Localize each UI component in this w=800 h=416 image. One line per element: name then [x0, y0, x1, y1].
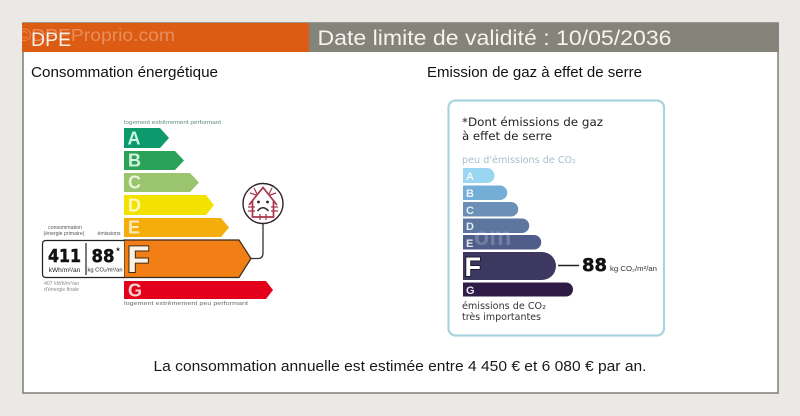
label: bottom of energy scale: logement extrêmement peu performant	[124, 301, 249, 307]
energy bar G: G	[128, 280, 142, 300]
label: low emissions: peu d'émissions de CO₂	[462, 155, 576, 166]
energy bar G	[124, 280, 273, 300]
value: 88 CO2: 88	[92, 246, 114, 267]
text: annual cost estimate: La consommation annuelle est estimée entre 4 450 € et 6 080 € par an.	[154, 359, 646, 375]
heading: energy consumption: Consommation énergétique	[31, 65, 218, 81]
caption: emissions: émissions	[97, 231, 121, 237]
energy bar B	[124, 150, 184, 170]
chart: energy label scale	[124, 120, 273, 307]
header: orange DPE band: DPE	[31, 29, 71, 51]
value: 88 kg CO2	[558, 255, 657, 276]
CO2 bar C: C	[466, 205, 474, 217]
CO2 bar D	[463, 218, 529, 233]
callout: primary energy and emissions values: kg CO₂/m²/an	[87, 268, 123, 274]
callout: primary energy and emissions values	[42, 225, 124, 293]
value: 88 kg CO2: kg CO₂/m²/an	[610, 266, 657, 273]
energy bar B: B	[128, 150, 141, 170]
callout: primary energy and emissions values: *	[116, 246, 120, 256]
callout: primary energy and emissions values: (énergie primaire)	[44, 231, 85, 237]
energy bar A	[124, 128, 169, 148]
header: orange DPE band	[22, 23, 309, 52]
energy bar D: D	[128, 196, 141, 216]
CO2 bar G	[463, 282, 573, 297]
panel: CO2 emissions box: très importantes	[462, 312, 541, 323]
callout: primary energy and emissions values: kWh/m²/an	[49, 267, 81, 274]
energy bar F (selected)	[124, 239, 251, 280]
energy bar D	[124, 195, 214, 216]
label: top of energy scale: logement extrêmement performant	[124, 120, 222, 126]
CO2 bar E: E	[466, 238, 473, 250]
CO2 bar D: D	[466, 221, 474, 233]
energy bar C	[124, 172, 199, 192]
value: 88 kg CO2: 88	[582, 255, 607, 276]
text: greenhouse gas note: *Dont émissions de gaz	[462, 115, 603, 129]
CO2 bar B	[463, 186, 507, 200]
CO2 bar E	[463, 235, 541, 250]
heading: greenhouse gas emissions: Emission de gaz à effet de serre	[427, 65, 642, 81]
CO2 bar A	[463, 168, 494, 183]
CO2 bar G: G	[466, 285, 475, 297]
header: validity date band	[309, 23, 779, 52]
energy bar C: C	[128, 172, 141, 192]
header: validity date band: Date limite de validité : 10/05/2036	[318, 26, 672, 50]
watermark: .com fragment: om	[474, 223, 512, 251]
CO2 bar C	[463, 202, 518, 217]
energy bar F (selected): F	[127, 239, 150, 280]
panel: CO2 emissions box: à effet de serre	[462, 129, 552, 143]
caption: primary energy: consommation	[48, 225, 82, 231]
icon: sad house in circle with connector	[243, 184, 283, 258]
caption: final energy: 407 kWh/m²/an	[44, 281, 79, 287]
energy bar E	[124, 218, 229, 238]
energy bar A: A	[128, 128, 140, 148]
callout: primary energy and emissions values: d'énergie finale	[44, 287, 79, 293]
label: high emissions: émissions de CO₂	[462, 301, 546, 312]
watermark: ©DPEProprio.com	[17, 25, 175, 45]
value: 411 kWh: 411	[48, 246, 81, 267]
value box	[42, 240, 124, 278]
CO2 bar B: B	[466, 188, 474, 200]
CO2 bar A: A	[466, 171, 474, 183]
CO2 bar F (selected): F	[464, 252, 481, 282]
energy bar E: E	[128, 218, 140, 238]
CO2 bar F (selected)	[463, 252, 556, 282]
panel: CO2 emissions box	[448, 100, 664, 336]
